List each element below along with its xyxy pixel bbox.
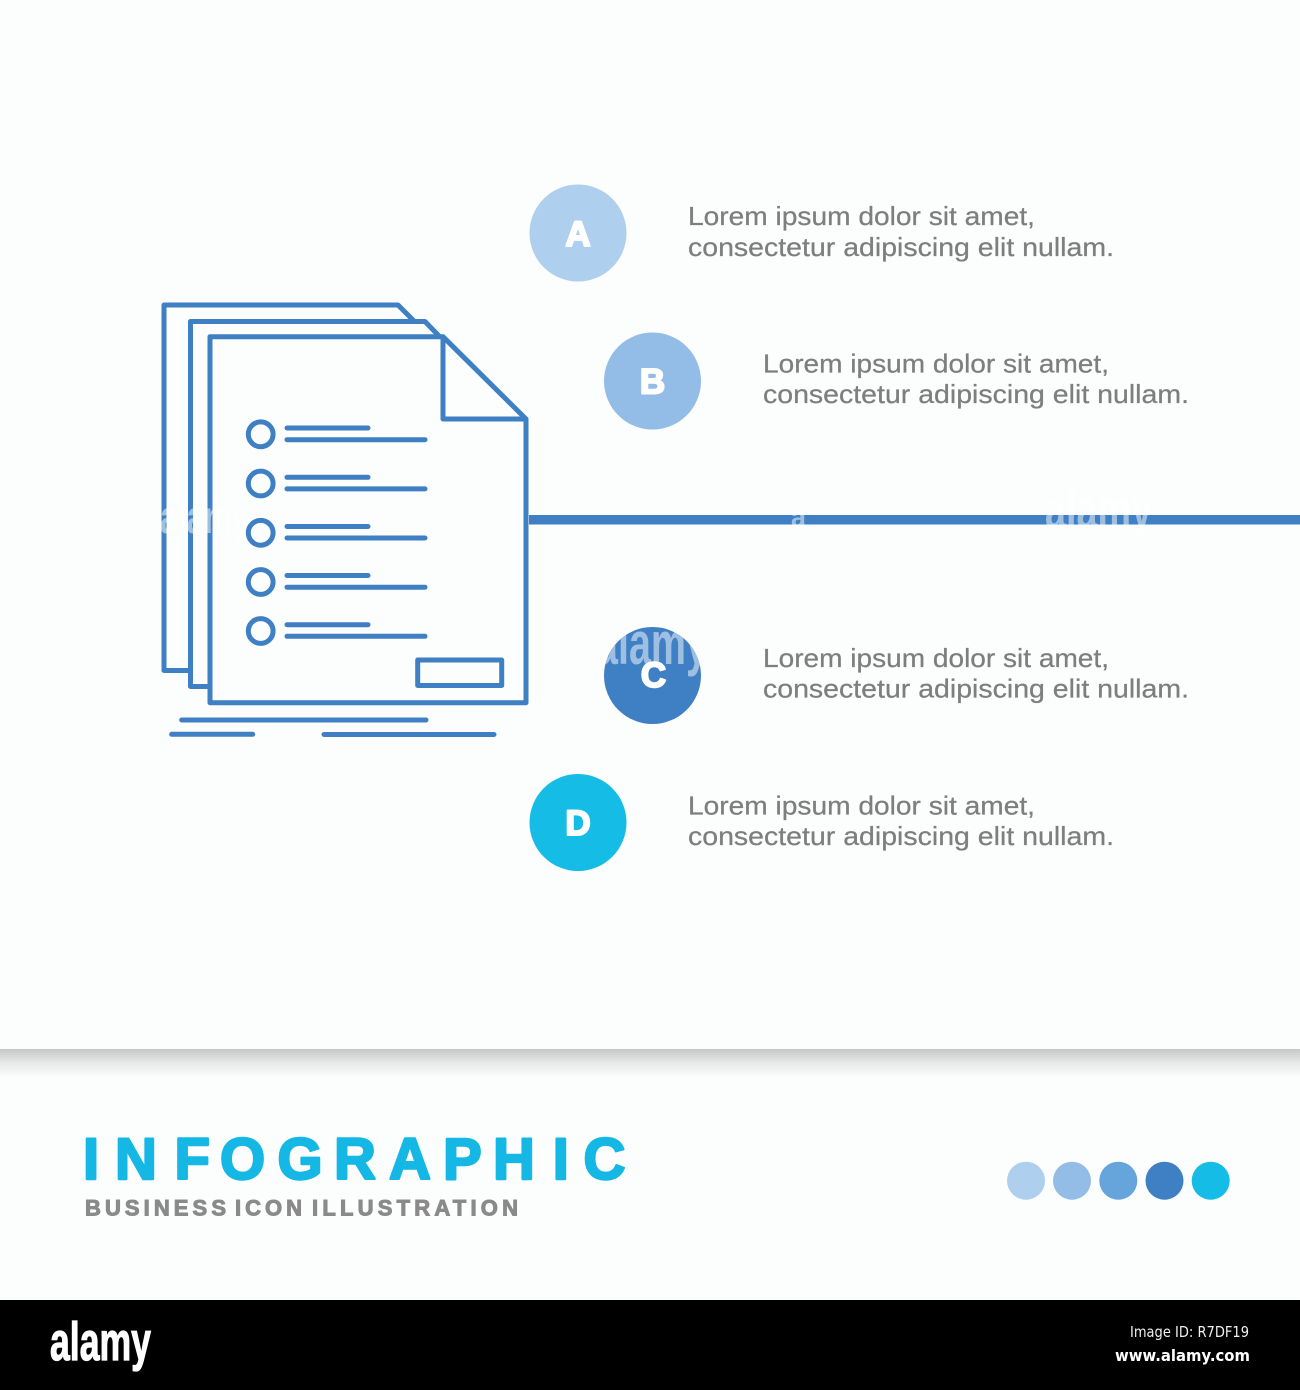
footer band shadow: [0, 1049, 1300, 1078]
front page with folded corner: [210, 337, 526, 703]
step A: [530, 184, 1114, 282]
badge A: [530, 184, 626, 282]
subtitle: BUSINESS: [85, 1196, 226, 1220]
badge C: C: [641, 656, 666, 695]
back page: [164, 305, 413, 670]
subtitle: ILLUSTRATION: [312, 1196, 518, 1220]
alamy logo: alamy: [50, 1312, 151, 1372]
badge C: alamy: [596, 610, 708, 677]
signature box: [418, 660, 502, 686]
step C: [604, 627, 1187, 724]
text B: [763, 348, 1189, 409]
badge B: B: [640, 362, 665, 402]
footer bar: [0, 1300, 1300, 1390]
middle page: [190, 322, 439, 686]
text D: [688, 790, 1114, 851]
title: INFOGRAPHIC: [83, 1127, 625, 1192]
connector line: [529, 515, 1300, 524]
text B: Lorem ipsum dolor sit amet,: [763, 348, 1109, 378]
text A: Lorem ipsum dolor sit amet,: [688, 201, 1035, 231]
checklist row 4: [248, 570, 425, 594]
badge A: A: [565, 215, 591, 254]
subtitle: [85, 1196, 518, 1220]
icon: checklist documents: [164, 305, 526, 734]
text A: [688, 201, 1114, 262]
watermarks: [160, 477, 1152, 543]
ground lines: [172, 720, 494, 734]
watermarks: alamy: [1045, 477, 1152, 540]
website: www.alamy.com: [1115, 1346, 1250, 1365]
text C: Lorem ipsum dolor sit amet,: [763, 643, 1109, 673]
text C: [763, 643, 1189, 704]
badge D: [530, 774, 626, 871]
subtitle: ICON: [235, 1196, 302, 1220]
watermarks: a: [791, 501, 806, 534]
step B: [604, 332, 1189, 430]
checklist row 2: [248, 471, 425, 496]
checklist row 3: [248, 520, 425, 545]
image id: Image ID: R7DF19: [1130, 1323, 1249, 1341]
badge B: [604, 332, 701, 430]
checklist row 5: [248, 619, 425, 643]
step D: [530, 774, 1114, 871]
text C: consectetur adipiscing elit nullam.: [763, 674, 1189, 704]
text D: consectetur adipiscing elit nullam.: [688, 821, 1114, 851]
text B: consectetur adipiscing elit nullam.: [763, 379, 1189, 409]
watermarks: alamy: [160, 491, 250, 543]
badge C: [604, 627, 701, 724]
text D: Lorem ipsum dolor sit amet,: [688, 790, 1035, 820]
badge D: D: [565, 804, 591, 843]
checklist row 1: [248, 422, 425, 447]
color dots: [1007, 1162, 1230, 1200]
text A: consectetur adipiscing elit nullam.: [688, 232, 1114, 262]
